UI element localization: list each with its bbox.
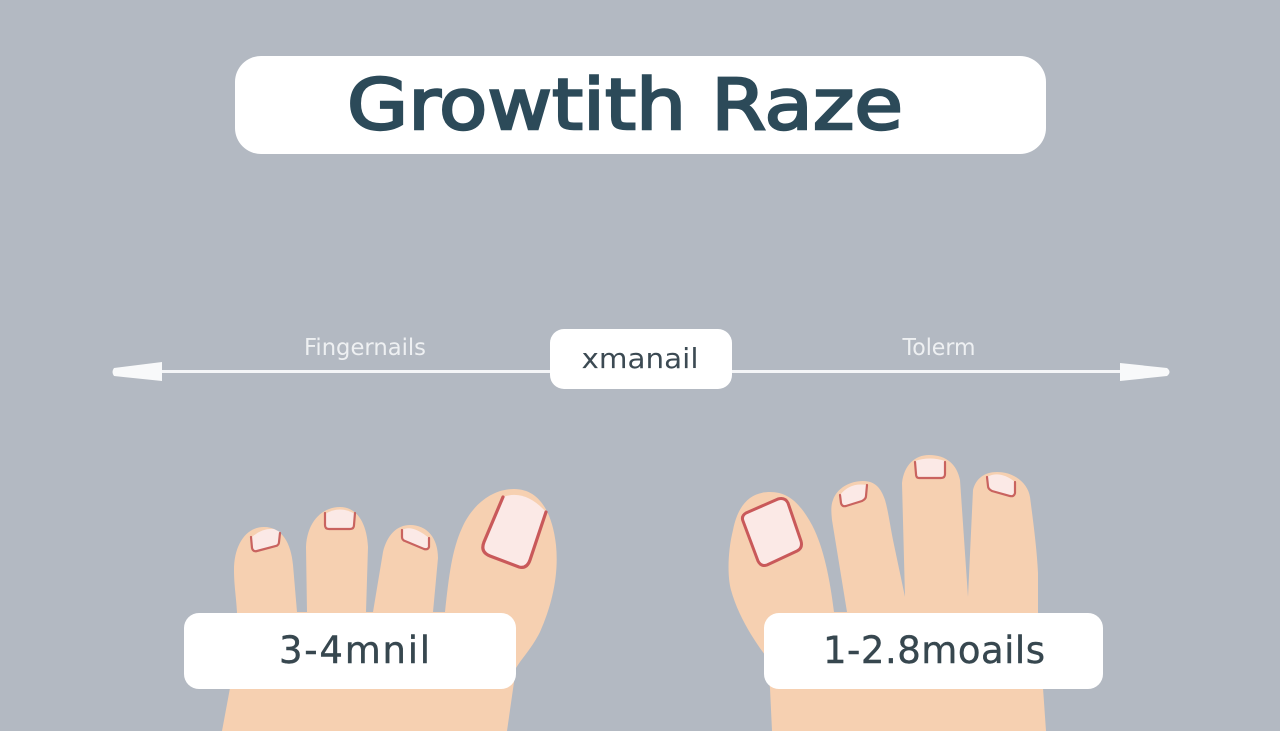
nail: left second toe [325,510,355,529]
title: Growtith Raze [347,64,903,146]
nail: left big toe [483,495,546,567]
center label: xmanail [582,342,698,375]
nail: right third toe [915,458,945,478]
scale arrow [112,362,1170,381]
right value label [764,613,1103,689]
nail: right big toe [742,498,802,566]
nail: left third toe [402,528,429,549]
label: fingernails: Fingernails [304,335,426,361]
right value label: 1-2.8moails [823,629,1045,672]
nail: right small toe [987,474,1015,496]
left foot [222,489,557,731]
label: tolerm: Tolerm [902,335,976,361]
center label [550,329,732,389]
title [235,56,1046,154]
nail: left small toe [251,529,280,552]
left value label [184,613,516,689]
nail: right second toe [840,484,867,506]
right foot [729,455,1046,731]
left value label: 3-4mnil [279,629,430,672]
